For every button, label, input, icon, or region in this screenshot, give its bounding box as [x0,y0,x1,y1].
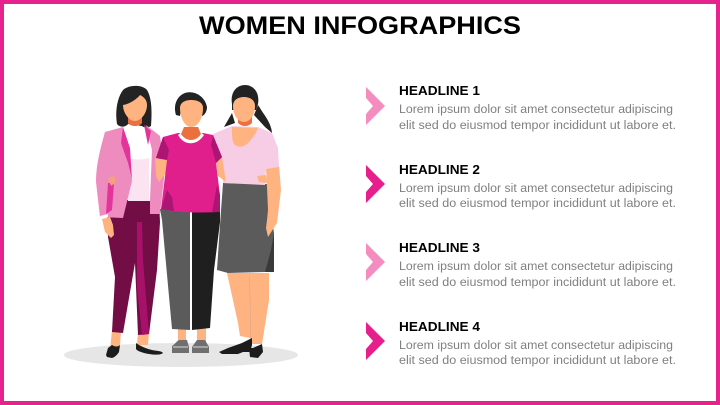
headline 3: HEADLINE 3 [399,241,480,255]
body text 2: elit sed do eiusmod tempor incididunt ut labore et. [399,196,676,210]
hair top [232,85,258,110]
item 1 [366,84,676,132]
body text 4: elit sed do eiusmod tempor incididunt ut labore et. [399,353,676,367]
body text 1: elit sed do eiusmod tempor incididunt ut labore et. [399,118,676,132]
headline 2: HEADLINE 2 [399,163,480,177]
arrow: light pink chevron [366,87,385,125]
woman: right, pink blouse and grey skirt [213,85,281,358]
shoes [219,338,252,354]
legs [227,273,269,344]
item 3 [366,241,676,289]
arrow: magenta chevron [366,165,385,203]
item 2 [366,163,676,210]
illustration: three women [64,85,298,367]
body text 3: Lorem ipsum dolor sit amet consectetur adipiscing [399,259,673,273]
body text 1: Lorem ipsum dolor sit amet consectetur adipiscing [399,102,673,116]
arrow: magenta chevron [366,322,385,360]
skirt [217,183,274,273]
woman: middle, magenta top and two-tone trousers [155,92,226,353]
hair back [224,105,272,133]
body text 2: Lorem ipsum dolor sit amet consectetur adipiscing [399,181,673,195]
item 4 [366,320,676,367]
arm [266,165,281,237]
headline 1: HEADLINE 1 [399,84,480,98]
face [233,97,255,122]
body text 3: elit sed do eiusmod tempor incididunt ut labore et. [399,275,676,289]
ground shadow [64,343,298,367]
headline 4: HEADLINE 4 [399,320,480,334]
woman: left, pink blazer [96,86,165,358]
arrow: light pink chevron [366,243,385,281]
body text 4: Lorem ipsum dolor sit amet consectetur adipiscing [399,338,673,352]
hand [257,175,267,183]
neckline [232,127,258,147]
title: WOMEN INFOGRAPHICS [199,12,521,40]
blouse [213,126,279,185]
